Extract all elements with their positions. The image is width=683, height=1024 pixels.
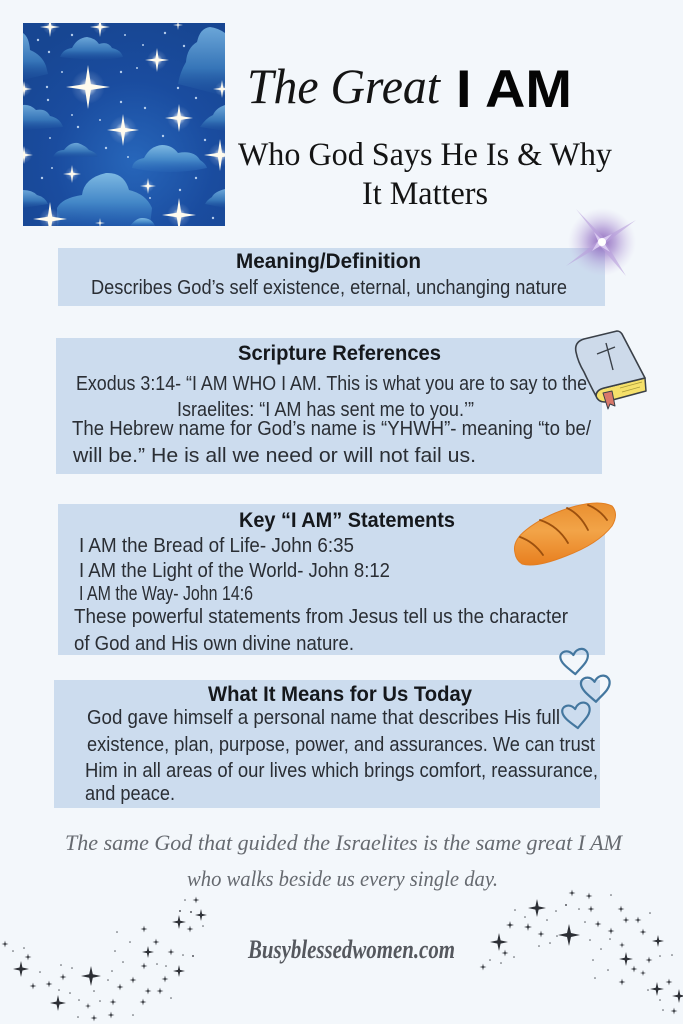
- subtitle: It Matters: [362, 176, 488, 212]
- subtitle: Who God Says He Is & Why: [238, 137, 612, 173]
- image: starry night sky with clouds: [23, 23, 225, 226]
- text: today body: existence, plan, purpose, power, and assurances. We can trust: [87, 734, 595, 756]
- closing script quote: [65, 830, 624, 891]
- icon: bible: [576, 331, 646, 409]
- panel: key I AM statements: [58, 504, 605, 655]
- text: today body: and peace.: [85, 783, 175, 805]
- text: statements list: I AM the Bread of Life- John 6:35: [79, 535, 354, 557]
- closing script quote: who walks beside us every single day.: [187, 866, 498, 891]
- text: statements list: I AM the Way- John 14:6: [79, 583, 253, 605]
- text: statements list: of God and His own divine nature.: [74, 633, 354, 655]
- website name: Busyblessedwomen.com: [247, 935, 455, 964]
- title: [247, 58, 572, 119]
- text: statements list: These powerful statements from Jesus tell us the character: [74, 606, 568, 628]
- heading: today: What It Means for Us Today: [208, 683, 472, 706]
- panel: meaning/definition: [58, 248, 605, 306]
- heading: meaning: Meaning/Definition: [236, 250, 421, 273]
- text: statements list: [74, 535, 568, 655]
- text: meaning body: Describes God’s self existence, eternal, unchanging nature: [91, 277, 567, 299]
- text: scripture body: [72, 373, 591, 467]
- text: scripture body: Israelites: “I AM has sent me to you.’”: [177, 399, 474, 421]
- decoration: star cluster left: [2, 896, 207, 1022]
- closing script quote: The same God that guided the Israelites is the same great I AM: [65, 830, 624, 855]
- text: scripture body: will be.” He is all we need or will not fail us.: [72, 445, 476, 467]
- icon: purple sparkle: [566, 208, 636, 276]
- panel: scripture references: [56, 338, 602, 474]
- title: The Great: [247, 58, 441, 114]
- heading: key statements: Key “I AM” Statements: [239, 509, 455, 532]
- title: I AM: [456, 60, 572, 119]
- text: today body: [85, 707, 598, 805]
- text: today body: Him in all areas of our lives which brings comfort, reassurance,: [85, 760, 598, 782]
- decoration: star cluster right: [480, 890, 683, 1014]
- text: scripture body: The Hebrew name for God’s name is “YHWH”- meaning “to be/: [72, 418, 591, 440]
- icon: bread loaf: [514, 503, 616, 565]
- text: today body: God gave himself a personal name that describes His full: [87, 707, 560, 729]
- heading: scripture: Scripture References: [238, 342, 441, 365]
- text: scripture body: Exodus 3:14- “I AM WHO I AM. This is what you are to say to the: [76, 373, 587, 395]
- subtitle: [238, 137, 612, 212]
- icon: hearts: [560, 648, 611, 730]
- text: statements list: I AM the Light of the World- John 8:12: [79, 560, 390, 582]
- panel: what it means for us today: [54, 680, 600, 808]
